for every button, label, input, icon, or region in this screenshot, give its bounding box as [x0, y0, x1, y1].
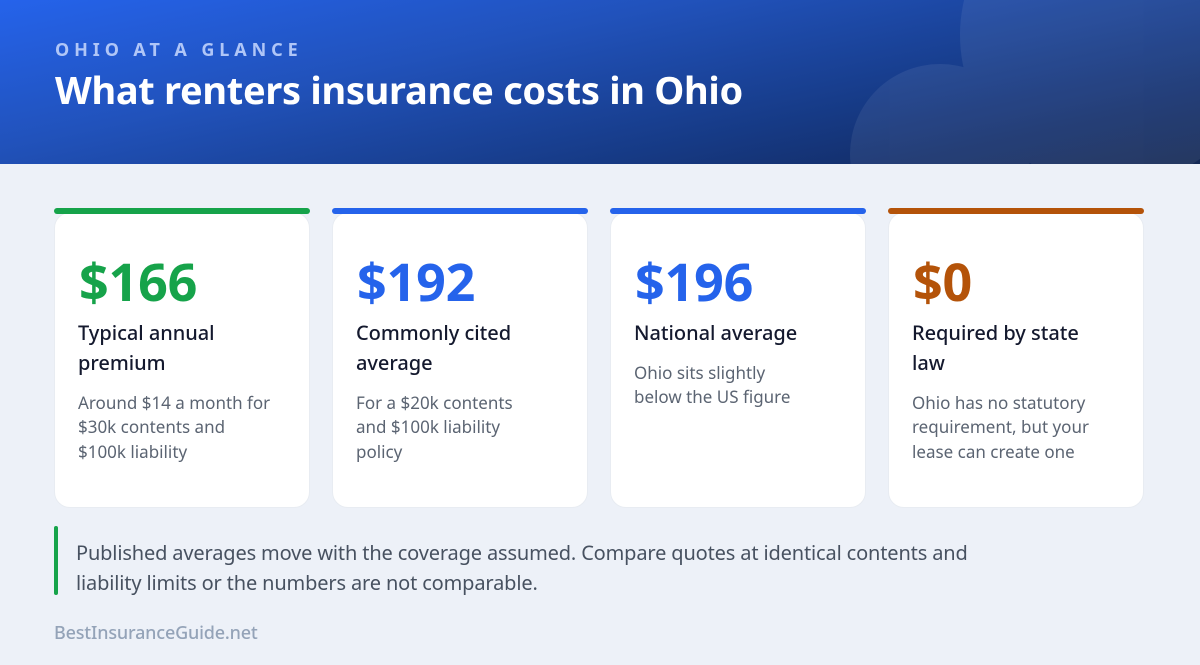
- callout text: [76, 539, 968, 596]
- label: Required by state: [912, 319, 1079, 346]
- eyebrow: OHIO AT A GLANCE: [55, 38, 303, 62]
- description: Ohio sits slightly: [634, 361, 765, 384]
- description: and $100k liability: [356, 415, 500, 438]
- label: [356, 319, 511, 376]
- label: [912, 319, 1079, 376]
- panel: national average: [610, 208, 866, 507]
- callout accent bar: [54, 526, 58, 595]
- label: law: [912, 349, 945, 376]
- description: [912, 391, 1089, 463]
- description: [78, 391, 270, 463]
- description: For a $20k contents: [356, 391, 513, 414]
- description: $30k contents and: [78, 415, 225, 438]
- description: $100k liability: [78, 440, 187, 463]
- description: Ohio has no statutory: [912, 391, 1085, 414]
- value: $196: [635, 246, 753, 317]
- value: $166: [79, 246, 197, 317]
- value: $0: [913, 246, 972, 317]
- label: Typical annual: [78, 319, 215, 346]
- description: [356, 391, 513, 463]
- title: What renters insurance costs in Ohio: [55, 64, 743, 116]
- description: below the US figure: [634, 385, 790, 408]
- callout text: liability limits or the numbers are not comparable.: [76, 569, 538, 596]
- description: lease can create one: [912, 440, 1075, 463]
- description: [634, 361, 790, 408]
- label: premium: [78, 349, 166, 376]
- source: BestInsuranceGuide.net: [54, 621, 258, 645]
- panel: typical annual premium: [54, 208, 310, 507]
- panel: required by state law: [888, 208, 1144, 507]
- decorative circles: [850, 0, 1200, 164]
- callout text: Published averages move with the coverage assumed. Compare quotes at identical contents and: [76, 539, 968, 566]
- label: Commonly cited: [356, 319, 511, 346]
- panel: commonly cited average: [332, 208, 588, 507]
- label: [78, 319, 215, 376]
- label: average: [356, 349, 433, 376]
- description: Around $14 a month for: [78, 391, 270, 414]
- value: $192: [357, 246, 475, 317]
- description: requirement, but your: [912, 415, 1089, 438]
- header banner: [0, 0, 1200, 164]
- label: National average: [634, 319, 797, 346]
- description: policy: [356, 440, 402, 463]
